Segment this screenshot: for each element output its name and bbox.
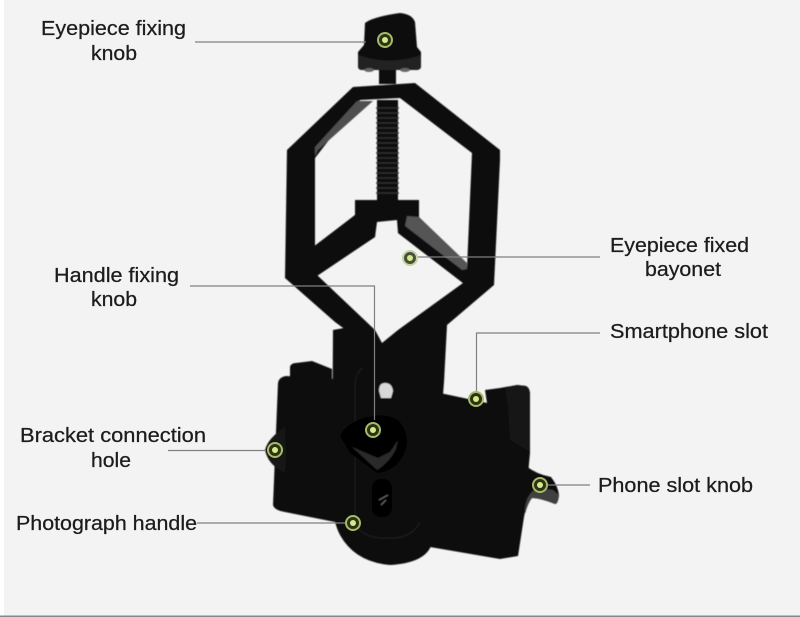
eyepiece fixing knob <box>358 13 421 72</box>
label: phone slot knob: Phone slot knob <box>598 475 753 497</box>
leader lines <box>168 42 600 523</box>
right clamp knob <box>485 451 559 517</box>
label: handle fixing knob: knob <box>91 289 137 311</box>
label: bracket connection hole: Bracket connection <box>20 425 206 447</box>
marker: photograph handle <box>346 516 360 530</box>
label: handle fixing knob: Handle fixing <box>54 265 179 287</box>
marker dots <box>268 33 547 530</box>
label: eyepiece fixing knob <box>41 18 186 65</box>
label: eyepiece fixed bayonet: bayonet <box>645 259 721 281</box>
label: eyepiece fixed bayonet <box>610 235 749 281</box>
left phone clamp <box>265 361 335 522</box>
hexagonal eyepiece clamp frame <box>285 83 500 352</box>
threaded screw <box>376 68 399 202</box>
marker: eyepiece fixing knob <box>378 33 392 47</box>
marker: eyepiece fixed bayonet <box>403 251 417 265</box>
label: eyepiece fixed bayonet: Eyepiece fixed <box>610 235 749 257</box>
marker: handle fixing knob <box>366 423 380 437</box>
photograph handle plate <box>332 325 447 565</box>
marker: bracket connection hole <box>268 443 282 457</box>
right phone clamp <box>430 385 530 559</box>
handle fixing knob <box>340 415 407 473</box>
marker: phone slot knob <box>533 478 547 492</box>
product: phone adapter bracket <box>265 13 559 565</box>
label: handle fixing knob <box>54 265 179 311</box>
label: bracket connection hole <box>20 425 206 472</box>
marker: smartphone slot <box>469 392 483 406</box>
label: eyepiece fixing knob: Eyepiece fixing <box>41 18 186 40</box>
label: photograph handle: Photograph handle <box>16 513 197 535</box>
label: bracket connection hole: hole <box>91 450 131 472</box>
label: smartphone slot: Smartphone slot <box>610 321 768 343</box>
label: eyepiece fixing knob: knob <box>91 43 137 65</box>
